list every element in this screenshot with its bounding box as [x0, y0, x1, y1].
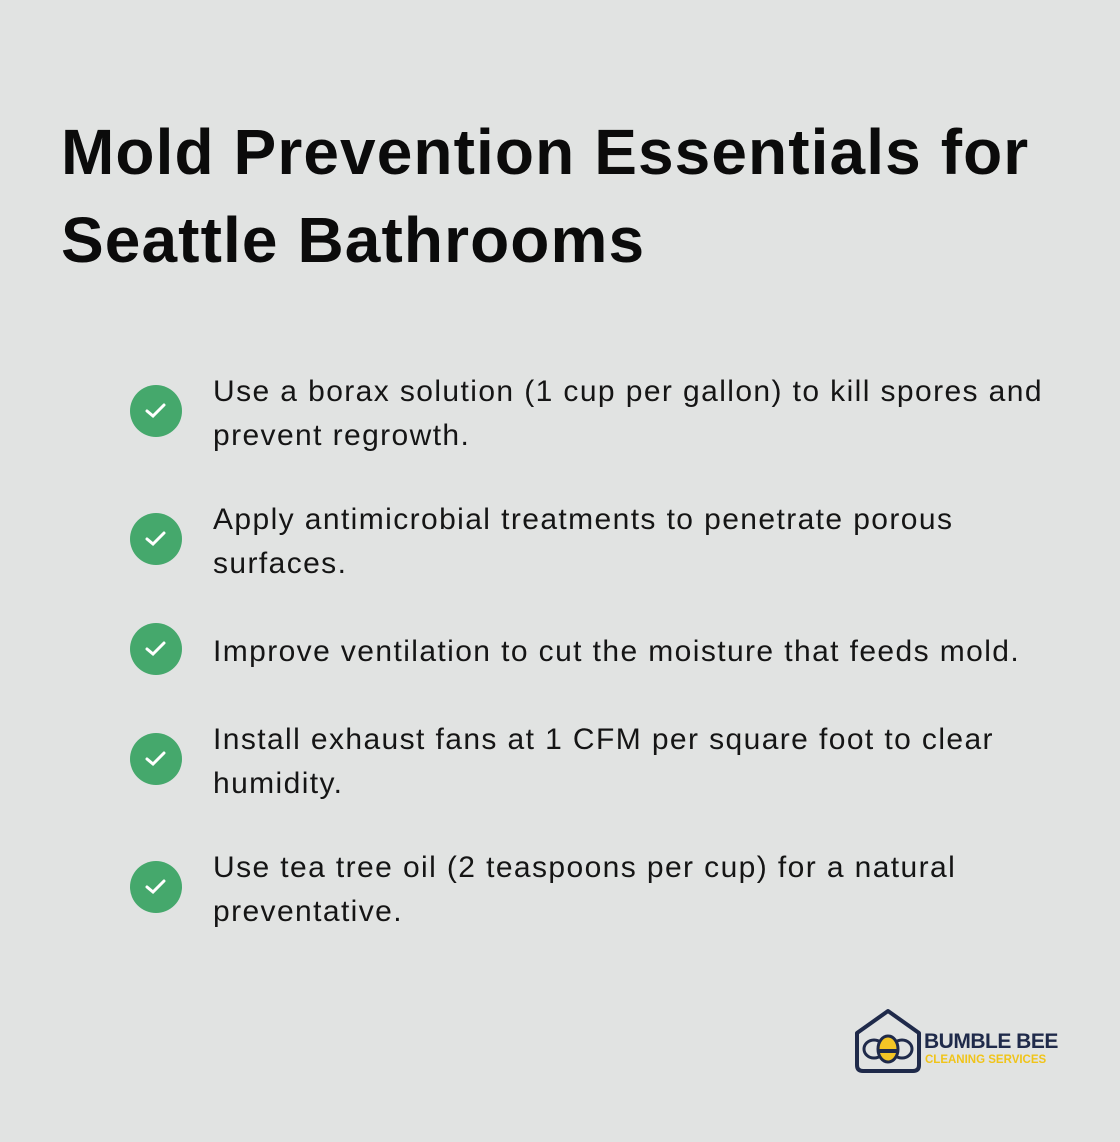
icon: check [130, 623, 182, 675]
icon: check [130, 513, 182, 565]
logo [855, 1009, 1058, 1073]
icon: check [130, 733, 182, 785]
text: surfaces. [213, 547, 347, 580]
icon: bee house [855, 1009, 921, 1073]
item 3 [130, 623, 1020, 675]
title: Mold Prevention Essentials for [61, 116, 1029, 188]
title: Seattle Bathrooms [61, 204, 645, 276]
item 5 [130, 851, 956, 928]
text: preventative. [213, 895, 403, 928]
icon: check [130, 385, 182, 437]
text [213, 723, 994, 800]
text [213, 375, 1043, 452]
logo text: BUMBLE BEE [924, 1030, 1058, 1053]
text: Use tea tree oil (2 teaspoons per cup) for a natural [213, 851, 956, 884]
title [61, 116, 1029, 276]
item 2 [130, 503, 953, 580]
item 1 [130, 375, 1043, 452]
text: prevent regrowth. [213, 419, 470, 452]
icon: check [130, 861, 182, 913]
text [213, 851, 956, 928]
text [213, 503, 953, 580]
text: Apply antimicrobial treatments to penetrate porous [213, 503, 953, 536]
text: Install exhaust fans at 1 CFM per square foot to clear [213, 723, 994, 756]
text: humidity. [213, 767, 343, 800]
item 4 [130, 723, 994, 800]
text: Improve ventilation to cut the moisture that feeds mold. [213, 635, 1020, 668]
logo: CLEANING SERVICES [925, 1054, 1046, 1066]
text: Use a borax solution (1 cup per gallon) to kill spores and [213, 375, 1043, 408]
